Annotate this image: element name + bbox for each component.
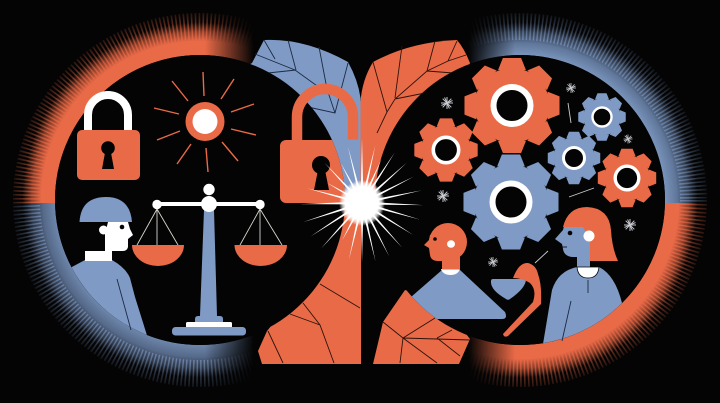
neck bbox=[442, 256, 460, 270]
small blue gear bbox=[578, 93, 626, 141]
man in helmet bbox=[72, 197, 147, 335]
panel: right circle bbox=[375, 55, 665, 345]
panel: left circle bbox=[55, 55, 345, 345]
face and neck bbox=[555, 226, 590, 270]
face bbox=[105, 222, 133, 251]
scales of justice bbox=[132, 184, 287, 336]
orange leaf, top right of centre bbox=[360, 40, 470, 205]
neck and collar bbox=[85, 251, 112, 261]
large blue gear bbox=[463, 154, 559, 250]
strings bbox=[137, 209, 282, 245]
orange leaf, bottom left of centre bbox=[258, 203, 361, 364]
hair bbox=[563, 207, 618, 261]
helmet bbox=[80, 197, 132, 222]
left orange gear bbox=[414, 118, 478, 182]
sparkle accents bbox=[437, 83, 636, 267]
woman with bob haircut bbox=[543, 207, 622, 344]
right orange gear bbox=[598, 149, 656, 207]
head bbox=[424, 223, 467, 261]
right halo: blue and orange burst ring bbox=[470, 13, 707, 387]
collar bbox=[441, 269, 460, 275]
icon: sun bbox=[154, 72, 256, 172]
collar bbox=[577, 267, 599, 278]
blue leaf, top left of centre bbox=[240, 40, 360, 200]
medium blue gear bbox=[548, 132, 600, 184]
wand bbox=[535, 251, 548, 263]
body bbox=[405, 270, 506, 319]
icon: open padlock bbox=[280, 89, 360, 203]
orange leaf, bottom right of centre bbox=[373, 290, 470, 364]
beam bbox=[157, 202, 260, 206]
gears cluster bbox=[414, 58, 656, 250]
icon: closed padlock bbox=[77, 95, 140, 180]
large orange gear bbox=[464, 58, 560, 153]
bald person bbox=[405, 223, 506, 319]
body bbox=[72, 260, 147, 335]
body bbox=[543, 267, 622, 344]
left halo: orange and blue burst ring bbox=[13, 13, 252, 387]
pans bbox=[132, 245, 184, 266]
heart bbox=[491, 279, 526, 300]
hand holding heart bbox=[491, 251, 548, 337]
column bbox=[200, 210, 217, 316]
central white starburst bbox=[300, 138, 423, 263]
arm bbox=[503, 263, 541, 337]
